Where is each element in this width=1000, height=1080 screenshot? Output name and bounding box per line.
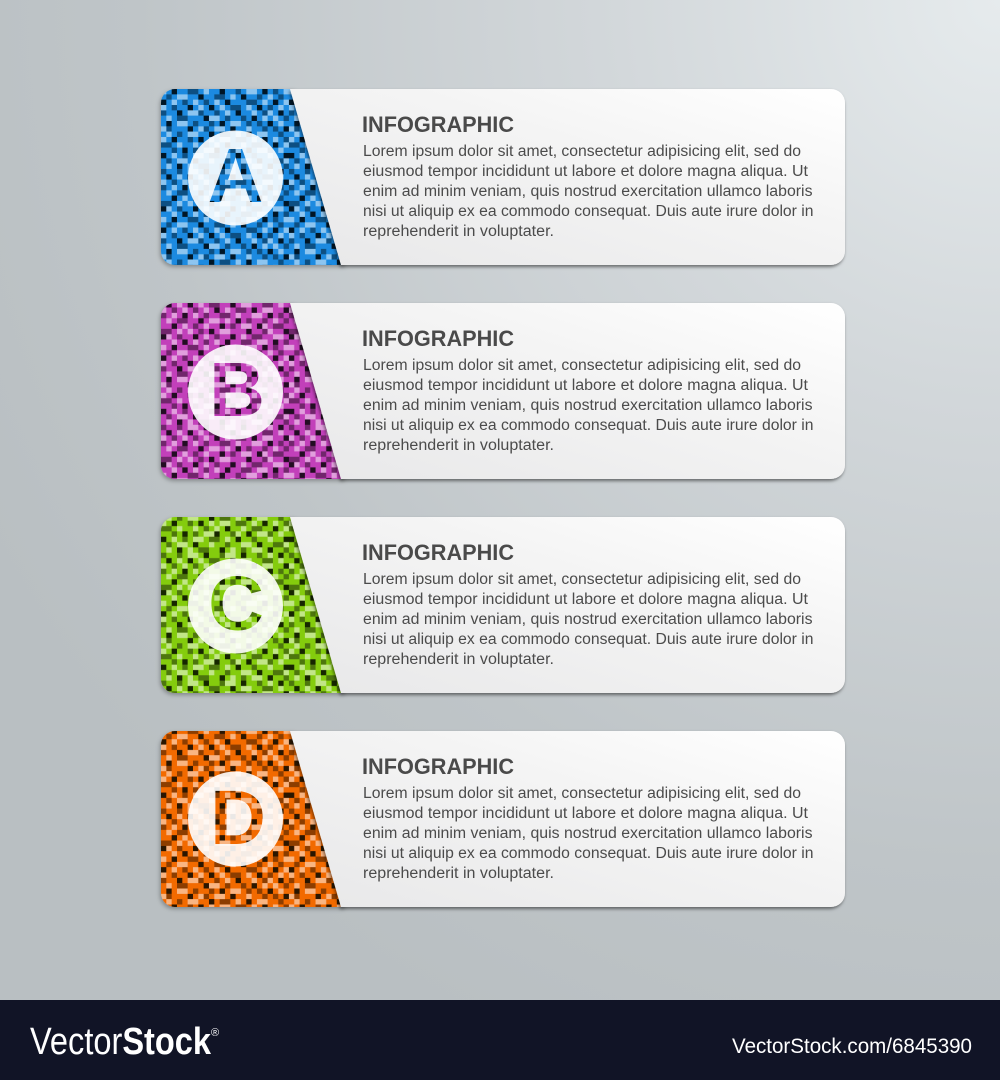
text panel D <box>290 731 845 907</box>
text panel B <box>290 303 845 479</box>
body text D <box>363 785 814 882</box>
banner D <box>161 731 845 907</box>
body text B: Lorem ipsum dolor sit amet, consectetur adipisicing elit, sed do <box>363 357 801 374</box>
mosaic panel A <box>161 89 346 265</box>
VectorStock logo: VectorStock <box>30 1021 212 1063</box>
letter circle C <box>188 558 283 654</box>
body text C: Lorem ipsum dolor sit amet, consectetur adipisicing elit, sed do <box>363 571 801 588</box>
body text A: eiusmod tempor incididunt ut labore et dolore magna aliqua. Ut <box>363 163 809 180</box>
heading D: INFOGRAPHIC <box>362 754 514 779</box>
registered mark: ® <box>211 1027 219 1039</box>
body text D: eiusmod tempor incididunt ut labore et dolore magna aliqua. Ut <box>363 805 809 822</box>
body text A: nisi ut aliquip ex ea commodo consequat. Duis aute irure dolor in <box>363 203 814 220</box>
banner C <box>161 517 845 693</box>
body text A: Lorem ipsum dolor sit amet, consectetur adipisicing elit, sed do <box>363 143 801 160</box>
heading B: INFOGRAPHIC <box>362 326 514 351</box>
body text C: reprehenderit in voluptater. <box>363 651 554 668</box>
mosaic panel C <box>161 517 346 693</box>
body text B <box>363 357 814 454</box>
body text C: eiusmod tempor incididunt ut labore et dolore magna aliqua. Ut <box>363 591 809 608</box>
text panel A <box>290 89 845 265</box>
letter circle D <box>188 772 283 866</box>
body text C: nisi ut aliquip ex ea commodo consequat. Duis aute irure dolor in <box>363 631 814 648</box>
body text B: eiusmod tempor incididunt ut labore et dolore magna aliqua. Ut <box>363 377 809 394</box>
letter circle B <box>188 344 283 440</box>
letter circle A <box>188 130 283 226</box>
body text C: enim ad minim veniam, quis nostrud exercitation ullamco laboris <box>363 611 813 628</box>
mosaic panel B <box>161 303 346 479</box>
body text D: Lorem ipsum dolor sit amet, consectetur adipisicing elit, sed do <box>363 785 801 802</box>
heading C: INFOGRAPHIC <box>362 540 514 565</box>
body text D: reprehenderit in voluptater. <box>363 865 554 882</box>
banner A <box>161 89 845 265</box>
body text C <box>363 571 814 668</box>
body text A <box>363 143 814 240</box>
mosaic panel D <box>161 731 346 907</box>
body text D: nisi ut aliquip ex ea commodo consequat. Duis aute irure dolor in <box>363 845 814 862</box>
text panel C <box>290 517 845 693</box>
body text A: reprehenderit in voluptater. <box>363 223 554 240</box>
body text B: reprehenderit in voluptater. <box>363 437 554 454</box>
body text D: enim ad minim veniam, quis nostrud exercitation ullamco laboris <box>363 825 813 842</box>
banner B <box>161 303 845 479</box>
heading A: INFOGRAPHIC <box>362 112 514 137</box>
footer bar <box>0 1000 1000 1080</box>
body text B: enim ad minim veniam, quis nostrud exercitation ullamco laboris <box>363 397 813 414</box>
body text B: nisi ut aliquip ex ea commodo consequat. Duis aute irure dolor in <box>363 417 814 434</box>
body text A: enim ad minim veniam, quis nostrud exercitation ullamco laboris <box>363 183 813 200</box>
image id: VectorStock.com/6845390 <box>732 1035 972 1058</box>
